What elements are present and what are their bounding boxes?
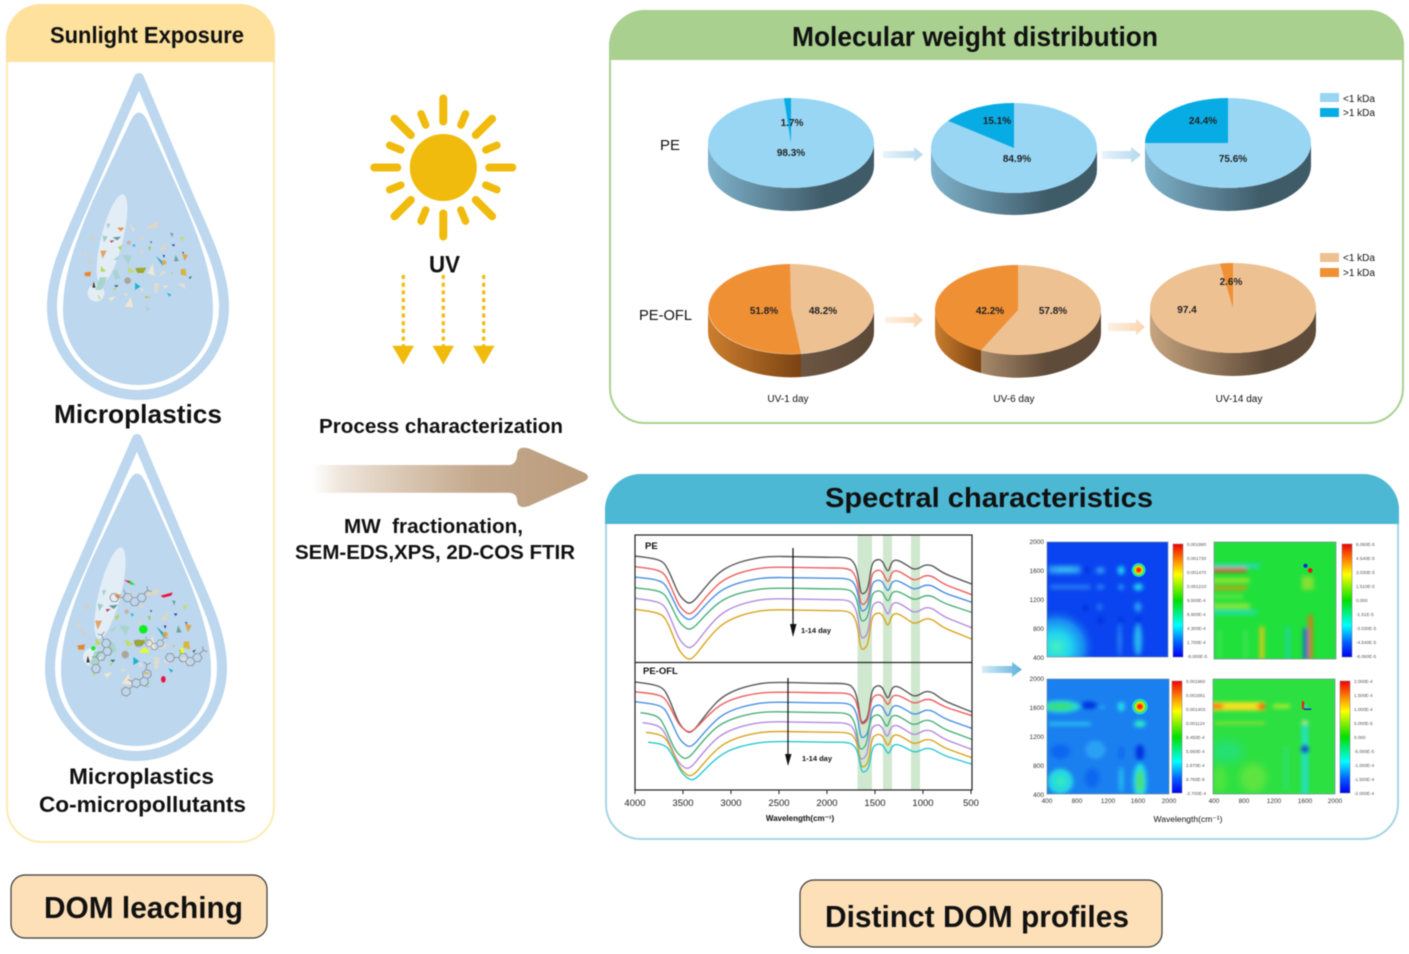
- pie: PE-OFL UV-6 day: 42.2%: [976, 306, 1004, 317]
- arrow: PE time trend: [790, 548, 832, 637]
- y ticks: 1200: [1030, 734, 1044, 741]
- pie: PE UV-1 day: [708, 98, 874, 211]
- color bar: 0.000: [1354, 735, 1366, 740]
- color bar: -5.000E-5: [1354, 749, 1375, 754]
- x ticks: 2000: [1162, 798, 1177, 805]
- arrow: PE day 1 to 6: [883, 147, 923, 162]
- icon: water drop with microplastics: [52, 78, 224, 395]
- panel header: sunlight exposure: [6, 4, 275, 62]
- pie: PE-OFL UV-14 day: 97.4: [1177, 305, 1197, 316]
- color bar: 4.540E-5: [1356, 556, 1375, 561]
- color bar: 9.500E-4: [1187, 598, 1206, 603]
- arrow: PE day 6 to 14: [1102, 147, 1141, 163]
- y ticks: 2000: [1030, 676, 1044, 683]
- y ticks: 400: [1033, 792, 1044, 799]
- color bar: 6.060E-5: [1356, 542, 1375, 547]
- color bar: -9.000E-5: [1187, 654, 1208, 659]
- x ticks: 2000: [1328, 798, 1343, 805]
- color bar: 0.001210: [1187, 584, 1207, 589]
- pie: PE-OFL UV-6 day: 57.8%: [1039, 306, 1067, 317]
- heatmap: PE asynchronous: [1211, 542, 1377, 660]
- color bar: 0.001681: [1186, 693, 1206, 698]
- labels: days: UV-1 day: [767, 394, 809, 405]
- axis tick labels: 1500: [864, 798, 886, 809]
- color bar: [1172, 679, 1207, 796]
- label: PE spectra: PE: [645, 541, 658, 552]
- color bar: 3.030E-5: [1356, 570, 1375, 575]
- color bar: 0.001470: [1187, 570, 1207, 575]
- color bar: 5.000E-5: [1354, 721, 1373, 726]
- pie: PE-OFL UV-14 day: 2.6%: [1220, 277, 1243, 288]
- legend: PE: <1 kDa: [1343, 94, 1375, 105]
- text: characterization methods: MW fractionation,: [344, 516, 523, 538]
- color bar: 4.300E-4: [1187, 626, 1206, 631]
- y ticks: [1030, 676, 1044, 799]
- legend: PE-OFL: [1320, 253, 1375, 279]
- pie: PE UV-14 day: 75.6%: [1219, 154, 1247, 165]
- panel: molecular weight distribution: [609, 10, 1404, 423]
- pie: PE UV-14 day: [1145, 98, 1311, 211]
- label: microplastics co-micropollutants: [39, 764, 246, 817]
- axis tick labels: 1000: [912, 798, 934, 809]
- axis tick labels: 2000: [816, 798, 838, 809]
- color bar: -2.700E-4: [1186, 791, 1207, 796]
- labels: days: UV-14 day: [1216, 394, 1262, 405]
- label: PE-OFL: PE-OFL: [639, 307, 692, 324]
- pie: PE UV-6 day: [931, 103, 1097, 215]
- panel header: molecular weight: [609, 10, 1404, 60]
- axis label: heatmaps: Wavelength(cm⁻¹): [1154, 814, 1223, 824]
- axis label: Wavelength(cm⁻¹): [766, 814, 835, 823]
- labels: days: [767, 394, 1262, 405]
- color bar: 2.870E-4: [1186, 763, 1205, 768]
- y ticks: 1600: [1030, 568, 1044, 575]
- label: PE: PE: [660, 137, 680, 154]
- pie: PE UV-14 day: 24.4%: [1189, 116, 1217, 127]
- pie: PE-OFL UV-1 day: 51.8%: [750, 306, 778, 317]
- text: characterization methods: SEM-EDS,XPS, 2D-COS FTIR: [295, 542, 576, 564]
- x ticks: 1200: [1101, 798, 1116, 805]
- color bar: 0.001730: [1187, 556, 1207, 561]
- x ticks: 1600: [1131, 798, 1146, 805]
- color bar: 1.700E-4: [1187, 640, 1206, 645]
- arrow: PE time trend: 1-14 day: [801, 626, 832, 635]
- color bar: [1340, 679, 1375, 796]
- color bar: 1.500E-4: [1354, 693, 1373, 698]
- color bar: 0.001403: [1186, 707, 1206, 712]
- label: PE-OFL spectra: PE-OFL: [643, 666, 678, 677]
- color bar: [1173, 542, 1208, 659]
- axis tick labels: 4000: [624, 798, 646, 809]
- pie: PE UV-6 day: 84.9%: [1003, 154, 1031, 165]
- y ticks: 1200: [1030, 597, 1044, 604]
- pie: PE-OFL UV-14 day: [1150, 263, 1316, 376]
- arrow: PE-OFL time trend: 1-14 day: [802, 754, 833, 763]
- x ticks: 800: [1072, 798, 1083, 805]
- legend: PE: >1 kDa: [1343, 108, 1375, 119]
- color bar: 8.760E-6: [1186, 777, 1205, 782]
- color bar: -1.51E-5: [1356, 612, 1374, 617]
- heading: spectral characteristics: Spectral characteristics: [825, 482, 1153, 513]
- pie: PE UV-1 day: 98.3%: [777, 148, 805, 159]
- pie: PE-OFL UV-1 day: 48.2%: [809, 306, 837, 317]
- legend: PE-OFL: <1 kDa: [1343, 253, 1375, 264]
- arrows: UV rays: [392, 275, 494, 364]
- color bar: -1.000E-4: [1354, 763, 1375, 768]
- y ticks: 2000: [1030, 539, 1044, 546]
- label: microplastics: Microplastics: [54, 399, 222, 429]
- label: UV: UV: [429, 252, 460, 278]
- arrow: PE-OFL day 6 to 14: [1108, 319, 1145, 335]
- x ticks: [1042, 798, 1177, 805]
- panel: sunlight exposure: [6, 4, 275, 842]
- pie: PE-OFL UV-1 day: [708, 264, 874, 377]
- arrow: spectra to 2D-COS: [982, 662, 1022, 677]
- x ticks: [1209, 798, 1343, 805]
- heading: molecular weight distribution: Molecular weight distribution: [792, 21, 1158, 52]
- y ticks: [1030, 539, 1044, 662]
- x ticks: 800: [1239, 798, 1250, 805]
- heatmap: PE-OFL synchronous: [1030, 676, 1207, 805]
- pie: PE UV-1 day: 1.7%: [781, 118, 804, 129]
- label: microplastics co-micropollutants: Microplastics: [69, 764, 214, 789]
- axis tick labels: 3500: [672, 798, 694, 809]
- arrow: PE-OFL day 1 to 6: [885, 312, 923, 328]
- axis tick labels: 2500: [768, 798, 790, 809]
- panel header: spectral: [605, 474, 1399, 524]
- callout: distinct DOM profiles: [800, 880, 1162, 947]
- x ticks: 400: [1042, 798, 1053, 805]
- x ticks: 400: [1209, 798, 1220, 805]
- heatmap: PE-OFL asynchronous: [1209, 679, 1375, 805]
- axis tick labels: 3000: [720, 798, 742, 809]
- color bar: -6.060E-5: [1356, 654, 1377, 659]
- pie: PE-OFL UV-6 day: [935, 265, 1101, 378]
- color bar: 0.001960: [1186, 679, 1206, 684]
- color bar: 0.001124: [1186, 721, 1205, 726]
- arrow: process flow: [312, 448, 588, 507]
- callout: distinct DOM profiles: Distinct DOM profiles: [825, 899, 1129, 934]
- chart: FTIR spectra: [624, 535, 979, 823]
- color bar: 0.001990: [1187, 542, 1207, 547]
- color bar: 8.450E-4: [1186, 735, 1205, 740]
- color bar: -4.540E-5: [1356, 640, 1377, 645]
- label: microplastics co-micropollutants: Co-micropollutants: [39, 792, 246, 817]
- legend: PE-OFL: >1 kDa: [1343, 268, 1375, 279]
- y ticks: 400: [1033, 655, 1044, 662]
- color bar: 1.510E-5: [1356, 584, 1375, 589]
- color bar: -3.030E-5: [1356, 626, 1377, 631]
- heatmap: PE synchronous: [1017, 539, 1208, 686]
- icon: water drop with microplastics and co-micropollutants: [50, 439, 222, 756]
- text: characterization methods: [295, 516, 576, 564]
- heading: sunlight exposure: Sunlight Exposure: [50, 22, 244, 48]
- icon: sun: [374, 98, 512, 236]
- color bar: 6.900E-4: [1187, 612, 1206, 617]
- color bar: -1.500E-4: [1354, 777, 1375, 782]
- y ticks: 800: [1033, 763, 1044, 770]
- callout: DOM leaching: DOM leaching: [44, 890, 243, 925]
- color bar: 2.000E-4: [1354, 679, 1373, 684]
- axis tick labels: [624, 798, 979, 809]
- legend: PE: [1320, 93, 1375, 119]
- color bar: 5.660E-4: [1186, 749, 1205, 754]
- labels: days: UV-6 day: [993, 394, 1035, 405]
- axis tick labels: 500: [963, 798, 979, 809]
- color bar: -2.000E-4: [1354, 791, 1375, 796]
- color bar: 0.000: [1356, 598, 1368, 603]
- panel: spectral characteristics: [605, 474, 1399, 839]
- color bar: 1.000E-4: [1354, 707, 1373, 712]
- arrow: PE-OFL time trend: [785, 678, 833, 766]
- x ticks: 1600: [1298, 798, 1313, 805]
- callout: DOM leaching: [11, 875, 267, 938]
- x ticks: 1200: [1267, 798, 1282, 805]
- y ticks: 800: [1033, 626, 1044, 633]
- y ticks: 1600: [1030, 705, 1044, 712]
- pie: PE UV-6 day: 15.1%: [983, 116, 1011, 127]
- color bar: [1342, 542, 1377, 659]
- text: process characterization: Process characterization: [319, 416, 563, 438]
